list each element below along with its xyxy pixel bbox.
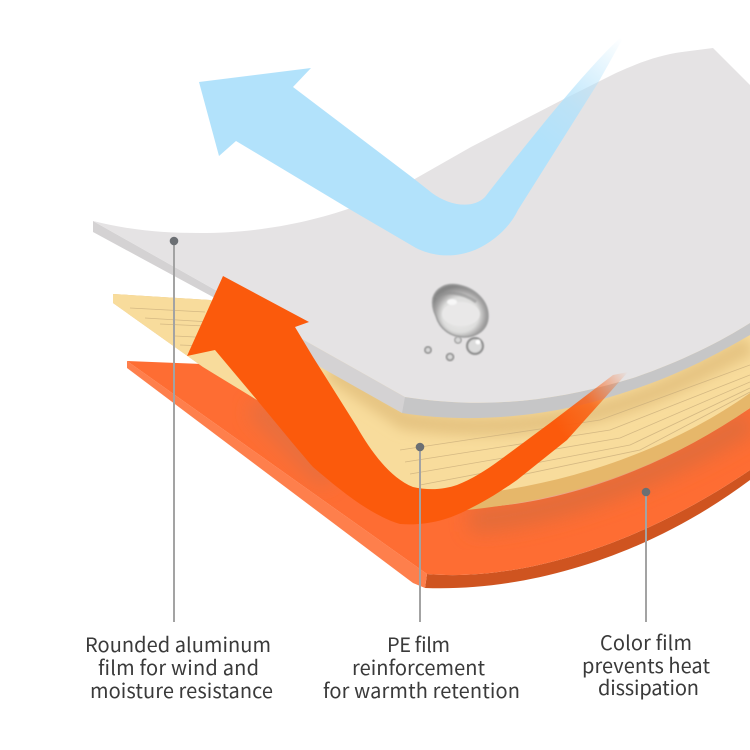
orange left face bbox=[127, 361, 427, 588]
layer: rounded aluminum film (gray) bbox=[93, 48, 750, 418]
label: PE film bbox=[323, 629, 520, 704]
droplet tiny bottom bbox=[447, 354, 453, 360]
leader line: PE film bbox=[416, 443, 424, 622]
wood rim bbox=[113, 294, 750, 515]
wood surface bbox=[113, 294, 750, 500]
arrow: body heat reflected (orange-red) bbox=[187, 276, 628, 524]
label: aluminum film: Rounded aluminum bbox=[85, 629, 271, 658]
label: color film: Color film bbox=[600, 627, 692, 656]
infographic: layered film diagram bbox=[87, 46, 750, 700]
large droplet bbox=[433, 285, 488, 337]
droplet small right bbox=[466, 337, 484, 355]
label: color film bbox=[582, 627, 710, 701]
label: aluminum film bbox=[85, 629, 273, 704]
layer: color film (orange) bbox=[127, 361, 750, 588]
icon: water droplets bbox=[425, 285, 488, 360]
wood shadow under aluminum bbox=[330, 345, 750, 426]
label: color film: dissipation bbox=[598, 672, 699, 701]
label: aluminum film: film for wind and bbox=[98, 652, 259, 681]
label: aluminum film: moisture resistance bbox=[90, 675, 273, 704]
label: PE film: PE film bbox=[387, 629, 450, 658]
droplet tiny left bbox=[425, 347, 431, 353]
label: PE film: for warmth retention bbox=[323, 675, 520, 704]
arrow: cold air reflected (blue) bbox=[199, 38, 622, 255]
wood grain bbox=[130, 308, 750, 492]
aluminum underside bbox=[402, 323, 750, 418]
layer: PE film (wood) bbox=[113, 294, 750, 515]
label: color film: prevents heat bbox=[582, 650, 710, 679]
droplet tiny top bbox=[455, 337, 461, 343]
orange shadow under wood bbox=[255, 405, 750, 520]
aluminum top surface bbox=[93, 48, 750, 403]
leader line: color film bbox=[642, 488, 650, 622]
orange top surface bbox=[127, 361, 750, 575]
orange bottom edge bbox=[425, 470, 750, 588]
label: PE film: reinforcement bbox=[352, 652, 485, 681]
aluminum left face bbox=[93, 221, 405, 413]
leader line: aluminum film bbox=[170, 237, 178, 622]
